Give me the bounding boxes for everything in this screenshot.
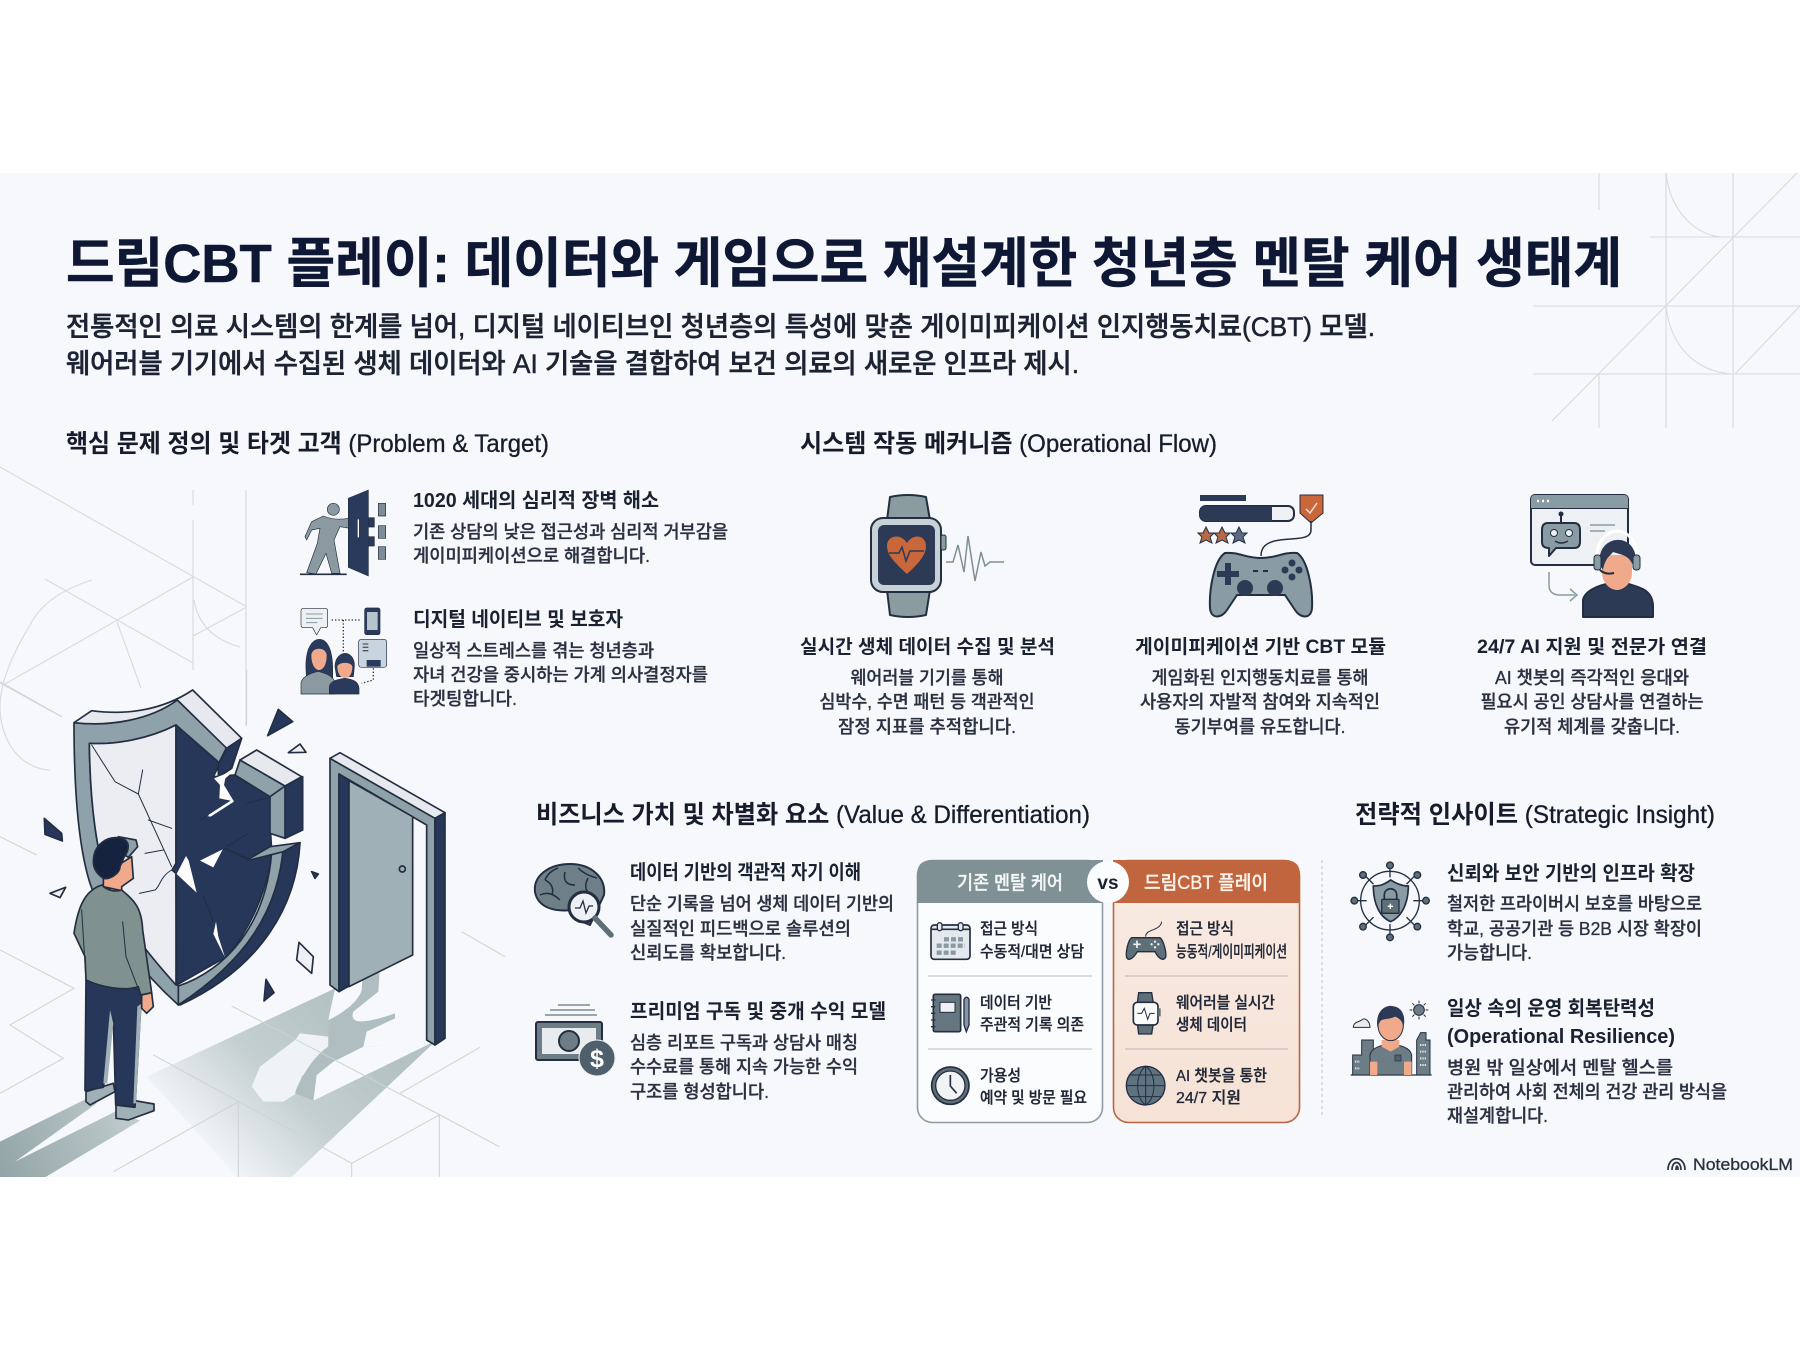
item: operational resilience: (Operational Resilience) (1447, 1026, 1675, 1048)
icon: digital natives and guardians (301, 608, 387, 694)
text: 24/7 AI support: 24/7 AI 지원 및 전문가 연결 (1477, 636, 1707, 658)
column: existing mental care: 기존 멘탈 케어 (957, 872, 1063, 894)
icon: clock (932, 1067, 969, 1104)
text: real-time biometric data: 실시간 생체 데이터 수집 및 분석 (800, 636, 1055, 658)
item: data-based self understanding (630, 861, 894, 963)
item: digital natives: 타겟팅합니다. (413, 689, 517, 709)
column: existing mental care: 접근 방식 (980, 920, 1038, 938)
figure shadow through door (295, 959, 395, 1101)
text: 24/7 AI support: AI 챗봇의 즉각적인 응대와 (1495, 668, 1689, 688)
column: DreamCBT Play: AI 챗봇을 통한 (1176, 1067, 1267, 1085)
column: DreamCBT Play: 생체 데이터 (1176, 1016, 1247, 1034)
icon: notebook and pencil (931, 994, 969, 1032)
icon: money and coin (536, 1005, 615, 1076)
item: subscription and brokerage: 구조를 형성합니다. (630, 1082, 769, 1102)
text: gamified CBT module: 사용자의 자발적 참여와 지속적인 (1140, 692, 1380, 712)
item: subscription and brokerage: 심층 리포트 구독과 상담사 매칭 (630, 1033, 858, 1053)
footer logo: NotebookLM: NotebookLM (1693, 1155, 1793, 1174)
column: existing mental care: 가용성 (980, 1067, 1021, 1085)
standing person (74, 837, 154, 1120)
text: gamified CBT module: 게이미피케이션 기반 CBT 모듈 (1135, 636, 1386, 658)
column: existing mental care: 데이터 기반 (980, 994, 1052, 1012)
subtitle (66, 312, 1375, 379)
item: operational resilience: 일상 속의 운영 회복탄력성 (1447, 997, 1655, 1020)
item: digital natives: 자녀 건강을 중시하는 가계 의사결정자를 (413, 665, 708, 685)
column: existing mental care (917, 860, 1103, 1122)
heading: operational flow: 시스템 작동 메커니즘 (Operational Flow) (800, 430, 1217, 458)
column: existing mental care: 주관적 기록 의존 (980, 1016, 1084, 1034)
item: operational resilience: 병원 밖 일상에서 멘탈 헬스를 (1447, 1058, 1673, 1078)
heading: value and differentiation: 비즈니스 가치 및 차별화 요소 (Value & Differentiation) (536, 801, 1090, 829)
column: DreamCBT Play: 능동적/게이미피케이션 (1176, 943, 1287, 961)
text: 24/7 AI support (1477, 636, 1707, 737)
item: operational resilience (1447, 997, 1727, 1126)
door frame and door (330, 753, 445, 1045)
broken shield (74, 690, 303, 1005)
title: 드림CBT 플레이: 데이터와 게임으로 재설계한 청년층 멘탈 케어 생태계 (66, 234, 1622, 294)
floor light wedge (147, 988, 433, 1178)
item: psychological barrier: 게이미피케이션으로 해결합니다. (413, 546, 650, 566)
icon: AI chatbot and counselor (1531, 495, 1653, 617)
VS badge: vs (1097, 873, 1119, 894)
comparison panel (917, 860, 1300, 1122)
icon: person pushing through barrier (300, 490, 386, 576)
subtitle: 웨어러블 기기에서 수집된 생체 데이터와 AI 기술을 결합하여 보건 의료의 새로운 인프라 제시. (66, 349, 1079, 379)
heading: strategic insight: 전략적 인사이트 (Strategic Insight) (1355, 801, 1715, 829)
column: DreamCBT Play: 드림CBT 플레이 (1144, 872, 1268, 894)
item: data-based self understanding: 데이터 기반의 객관적 자기 이해 (630, 861, 861, 884)
item: operational resilience: 재설계합니다. (1447, 1106, 1548, 1126)
item: data-based self understanding: 신뢰도를 확보합니다. (630, 943, 786, 963)
heading: problem and target: 핵심 문제 정의 및 타겟 고객 (Problem & Target) (66, 430, 549, 458)
text: real-time biometric data (800, 636, 1055, 737)
column: DreamCBT Play (1113, 860, 1300, 1122)
VS badge (1087, 861, 1129, 903)
item: subscription and brokerage (630, 1000, 886, 1102)
text: gamified CBT module: 게임화된 인지행동치료를 통해 (1152, 668, 1368, 688)
item: digital natives: 일상적 스트레스를 겪는 청년층과 (413, 641, 654, 661)
icon: smartwatch with heart rate (871, 495, 1004, 617)
text: 24/7 AI support: 필요시 공인 상담사를 연결하는 (1480, 692, 1704, 712)
column: DreamCBT Play: 접근 방식 (1176, 920, 1234, 938)
item: subscription and brokerage: 프리미엄 구독 및 중개 수익 모델 (630, 1000, 886, 1023)
item: trust and security (1447, 862, 1702, 963)
column: existing mental care: 수동적/대면 상담 (980, 943, 1084, 961)
text: gamified CBT module (1135, 636, 1386, 737)
text: real-time biometric data: 웨어러블 기기를 통해 (850, 668, 1004, 688)
person shadow (0, 1098, 140, 1178)
icon: person in city (1351, 1001, 1432, 1075)
item: digital natives: 디지털 네이티브 및 보호자 (413, 608, 623, 631)
text: 24/7 AI support: 유기적 체계를 갖춥니다. (1504, 717, 1680, 737)
item: trust and security: 철저한 프라이버시 보호를 바탕으로 (1447, 894, 1702, 914)
icon: brain with magnifier (535, 864, 611, 935)
column: DreamCBT Play: 웨어러블 실시간 (1176, 994, 1275, 1012)
item: psychological barrier (413, 489, 728, 566)
icon: gamepad (1126, 922, 1166, 959)
item: operational resilience: 관리하여 사회 전체의 건강 관리 방식을 (1447, 1082, 1727, 1102)
item: psychological barrier: 1020 세대의 심리적 장벽 해소 (413, 489, 659, 512)
icon: wearable watch (1133, 993, 1161, 1034)
item: data-based self understanding: 단순 기록을 넘어 생체 데이터 기반의 (630, 894, 894, 914)
text: gamified CBT module: 동기부여를 유도합니다. (1174, 717, 1346, 737)
item: subscription and brokerage: 수수료를 통해 지속 가능한 수익 (630, 1057, 858, 1077)
subtitle: 전통적인 의료 시스템의 한계를 넘어, 디지털 네이티브인 청년층의 특성에 맞춘 게이미피케이션 인지행동치료(CBT) 모델. (66, 312, 1375, 342)
icon: game controller with progress (1198, 495, 1323, 616)
item: trust and security: 학교, 공공기관 등 B2B 시장 확장이 (1447, 919, 1702, 939)
column: existing mental care: 예약 및 방문 필요 (980, 1089, 1087, 1107)
text: real-time biometric data: 심박수, 수면 패턴 등 객관적인 (820, 692, 1034, 712)
item: trust and security: 가능합니다. (1447, 943, 1532, 963)
icon: money and coin: $ (590, 1045, 604, 1073)
column: DreamCBT Play: 24/7 지원 (1176, 1089, 1241, 1107)
text: real-time biometric data: 잠정 지표를 추적합니다. (838, 717, 1016, 737)
icon: globe (1126, 1066, 1165, 1105)
illustration: person facing broken shield and open door (0, 670, 505, 1178)
item: psychological barrier: 기존 상담의 낮은 접근성과 심리적 거부감을 (413, 522, 728, 542)
item: data-based self understanding: 실질적인 피드백으로 솔루션의 (630, 919, 851, 939)
icon: shield network (1351, 862, 1429, 941)
background card (0, 173, 1800, 1177)
footer logo: NotebookLM (1667, 1158, 1792, 1170)
item: trust and security: 신뢰와 보안 기반의 인프라 확장 (1447, 862, 1695, 885)
icon: calendar (931, 923, 970, 959)
item: digital natives (413, 608, 708, 709)
flying shards (44, 709, 318, 1001)
